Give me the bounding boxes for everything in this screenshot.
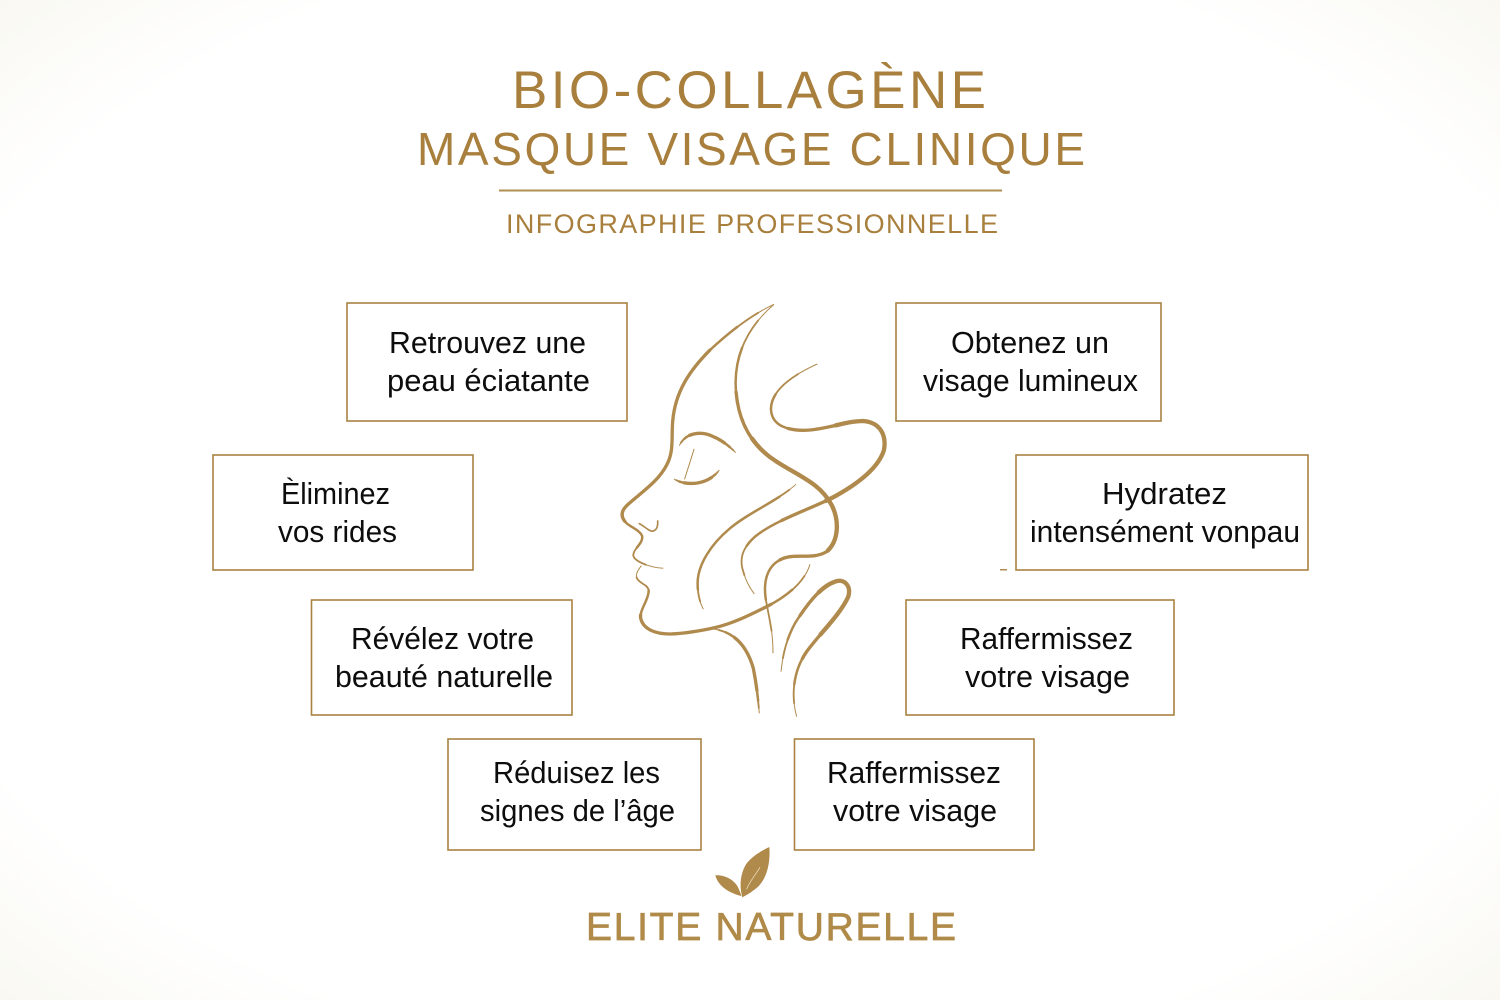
title: product name: BIO-COLLAGÈNE	[512, 61, 986, 120]
benefit: retrouvez une peau éclatante: peau éciatante	[387, 363, 590, 398]
benefit: hydratez intensément votre peau: intensément vonpau	[1030, 514, 1300, 549]
benefit: raffermissez votre visage (upper)	[906, 600, 1174, 715]
icon: line-art face profile	[622, 304, 885, 717]
benefit: révélez votre beauté naturelle	[312, 600, 572, 715]
benefit: obtenez un visage lumineux: visage lumineux	[923, 363, 1138, 398]
benefit: obtenez un visage lumineux: Obtenez un	[951, 325, 1109, 360]
benefit: réduisez les signes de l'âge	[448, 739, 701, 850]
benefit: réduisez les signes de l'âge: Réduisez les	[493, 755, 660, 790]
icon: leaf logo	[715, 847, 770, 897]
benefit: retrouvez une peau éclatante: Retrouvez une	[389, 325, 586, 360]
benefit: raffermissez votre visage (upper): Raffermissez	[960, 621, 1133, 656]
benefit: révélez votre beauté naturelle: beauté naturelle	[335, 659, 553, 694]
benefit: retrouvez une peau éclatante	[347, 303, 627, 421]
benefit: révélez votre beauté naturelle: Révélez votre	[351, 621, 534, 656]
benefit: raffermissez votre visage (upper): votre visage	[965, 659, 1130, 694]
benefit: réduisez les signes de l'âge: signes de l’âge	[480, 793, 675, 828]
benefit: hydratez intensément votre peau	[1016, 455, 1308, 570]
benefit: raffermissez votre visage (lower): votre visage	[833, 793, 997, 828]
benefit: obtenez un visage lumineux	[896, 303, 1161, 421]
benefit: hydratez intensément votre peau: Hydratez	[1102, 476, 1227, 511]
benefit: éliminez vos rides: vos rides	[278, 514, 397, 549]
title block	[417, 61, 1085, 239]
benefit: raffermissez votre visage (lower): Raffermissez	[827, 755, 1001, 790]
subtitle: mask name: MASQUE VISAGE CLINIQUE	[417, 123, 1085, 175]
benefit: éliminez vos rides	[213, 455, 473, 570]
tagline: INFOGRAPHIE PROFESSIONNELLE	[506, 209, 998, 239]
brand name: ELITE NATURELLE	[586, 906, 956, 949]
benefit: raffermissez votre visage (lower)	[794, 739, 1034, 850]
benefit: éliminez vos rides: Èliminez	[281, 476, 390, 511]
